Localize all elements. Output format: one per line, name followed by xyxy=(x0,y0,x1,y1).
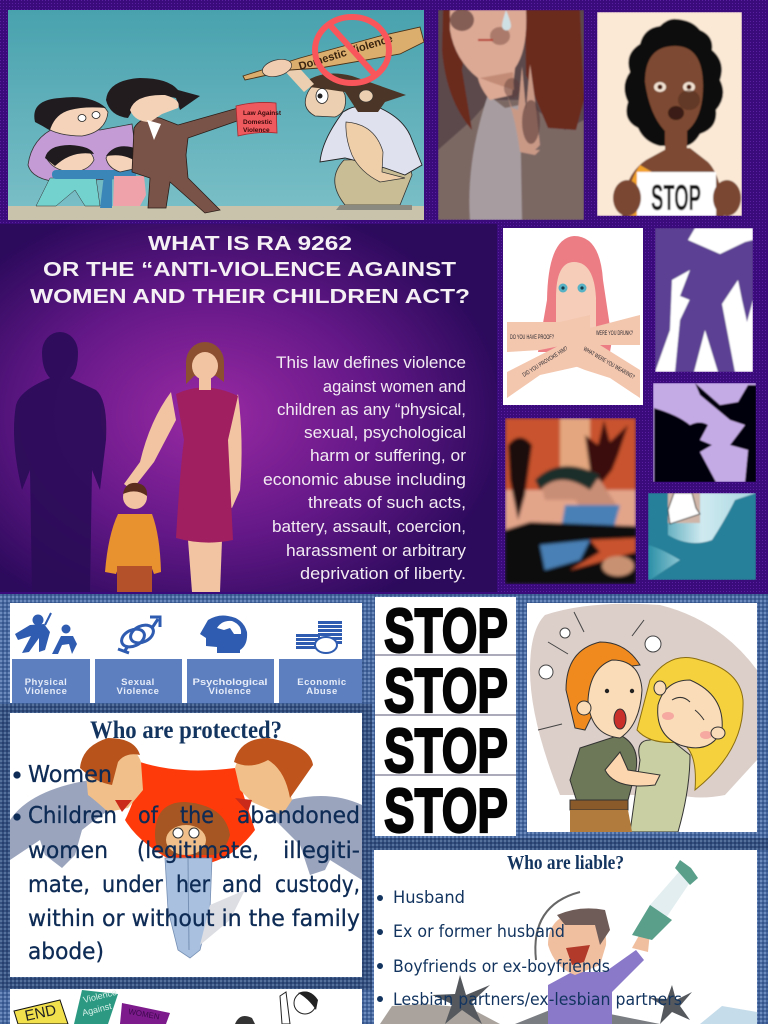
illustration: raised hand xyxy=(506,64,540,155)
panel: silenced woman with questioning hands: WERE YOU DRUNK? xyxy=(596,331,633,337)
panel: end violence placards xyxy=(10,987,362,1024)
list: liable persons: Husband xyxy=(393,888,465,907)
text: law definition: deprivation of liberty. xyxy=(300,565,466,583)
icon: violence against sign: Against xyxy=(81,1001,113,1018)
panel: who are liable xyxy=(374,850,757,1024)
list: liable persons xyxy=(377,888,682,1009)
illustration: shirt xyxy=(469,95,522,220)
list: protected persons xyxy=(14,762,360,965)
darker denim strip above liable panel xyxy=(372,838,768,850)
list: protected persons: under xyxy=(102,872,163,898)
heading: WOMEN AND THEIR CHILDREN ACT? xyxy=(30,286,470,308)
panel: four STOP signs: STOP xyxy=(384,657,508,726)
panel: family confronting abuser illustration xyxy=(8,10,424,220)
list: protected persons: illegiti- xyxy=(283,838,360,864)
icon: END sign xyxy=(14,1000,68,1024)
heading: who are protected: Who are protected? xyxy=(90,717,282,744)
panel: four STOP signs: STOP xyxy=(384,597,508,666)
panel: four STOP signs: STOP xyxy=(384,777,508,846)
panel: four STOP signs xyxy=(375,597,516,846)
label: physical violence: Violence xyxy=(25,686,67,697)
darker denim strip around protected panel xyxy=(0,704,372,990)
icon: women sign: WOMEN xyxy=(128,1007,161,1021)
list: protected persons: her xyxy=(176,872,210,898)
text: law definition: against women and xyxy=(323,378,466,396)
panel: woman holding STOP sign xyxy=(597,12,742,218)
panel: angry man grabbing crying woman xyxy=(527,603,757,832)
panel: fist over teal silhouette xyxy=(648,493,756,580)
callout: STOP sign: STOP xyxy=(651,177,701,218)
icon: law document: Violence xyxy=(243,127,270,134)
panel: four STOP signs: STOP xyxy=(384,717,508,786)
illustration: hands xyxy=(613,180,641,216)
illustration: woman in dress xyxy=(124,342,242,592)
icon: violence against sign xyxy=(74,987,118,1024)
text: law definition: economic abuse including xyxy=(263,471,466,489)
illustration: pink hair and face xyxy=(538,236,612,352)
list: protected persons: abandoned xyxy=(237,803,360,829)
illustration: abusive man xyxy=(282,60,422,210)
icon: physical violence xyxy=(15,613,77,654)
list: protected persons: Women xyxy=(28,762,112,788)
callout: STOP sign xyxy=(637,172,716,218)
icon: women sign xyxy=(120,1003,170,1024)
illustration: mother shielding children xyxy=(28,97,146,208)
icon: fist xyxy=(668,493,700,524)
illustration: drunk man with bottle xyxy=(380,860,757,1024)
illustration: male shadow silhouette xyxy=(14,332,106,592)
list: protected persons: within or without in the family xyxy=(28,906,360,932)
heading: WHAT IS RA 9262 xyxy=(148,233,352,255)
illustration: face and neck xyxy=(450,10,526,100)
label: economic abuse xyxy=(279,659,362,703)
label: psychological violence xyxy=(187,659,274,703)
icon: sexual violence symbols xyxy=(118,617,160,653)
text: law definition: harm or suffering, or xyxy=(310,447,467,465)
icon: law document: Domestic xyxy=(243,119,273,126)
panel: types of violence xyxy=(10,603,362,703)
denim background lower xyxy=(0,594,768,1024)
list: protected persons: women xyxy=(28,838,108,864)
text: law definition: children as any “physical, xyxy=(277,401,466,419)
heading: who are liable: Who are liable? xyxy=(507,852,624,874)
heading xyxy=(30,236,468,303)
list: liable persons: Boyfriends or ex-boyfriends xyxy=(393,957,610,976)
text: law definition: threats of such acts, xyxy=(308,494,466,512)
panel: silenced woman with questioning hands: WHAT WERE YOU WEARING? xyxy=(582,347,636,381)
text: law definition: harassment or arbitrary xyxy=(286,542,467,560)
illustration: child in orange xyxy=(105,483,161,592)
panel: RA 9262 explanation xyxy=(0,224,497,592)
icon: law document: Law Against xyxy=(243,110,282,117)
icon: psychological head xyxy=(200,616,247,653)
illustration: hanging hair shadow xyxy=(508,438,532,520)
icon: violence against sign: Violence xyxy=(82,987,118,1005)
text: law definition: This law defines violence xyxy=(276,354,466,372)
panel: silenced woman with questioning hands xyxy=(503,228,643,405)
list: liable persons: Ex or former husband xyxy=(393,922,565,941)
panel: bloody hand and cowering victim xyxy=(505,418,636,584)
illustration: cardigan xyxy=(438,100,584,220)
icon: bat labelled Domestic Violence xyxy=(243,27,424,80)
illustration: dark hand print xyxy=(585,420,628,485)
text: law definition: battery, assault, coercion, xyxy=(272,518,466,536)
illustration: protester sketch xyxy=(235,992,318,1024)
list: protected persons: mate, xyxy=(28,872,90,898)
illustration: hands with questions xyxy=(507,315,640,398)
icon: prohibition sign xyxy=(315,17,389,83)
label: economic abuse: Abuse xyxy=(306,686,338,697)
panel: who are protected xyxy=(10,713,362,977)
icon: economic coins xyxy=(296,621,342,653)
illustration: hair xyxy=(442,10,472,130)
list: liable persons: Lesbian partners/ex-lesbian partners xyxy=(393,990,682,1009)
label: psychological violence: Violence xyxy=(209,686,251,697)
illustration: mouth xyxy=(478,39,493,41)
illustration: man xyxy=(566,642,660,832)
panel: bruised woman close-up xyxy=(438,9,584,220)
illustration: dark foreground xyxy=(505,522,636,584)
panel: black silhouette on lilac xyxy=(653,383,756,482)
label: sexual violence xyxy=(95,659,182,703)
illustration: woman in brown suit xyxy=(106,78,240,213)
list: protected persons: Children xyxy=(28,803,117,829)
icon: law document xyxy=(236,102,282,136)
illustration: woman xyxy=(630,658,743,832)
list: protected persons: abode) xyxy=(28,939,104,965)
list: protected persons: of xyxy=(138,803,159,829)
list: protected persons: the xyxy=(180,803,214,829)
illustration: parents shouting over child xyxy=(10,738,362,958)
label: sexual violence: Violence xyxy=(117,686,159,697)
list: protected persons: and xyxy=(222,872,262,898)
text: law definition: sexual, psychological xyxy=(304,424,466,442)
label: physical violence xyxy=(12,659,90,703)
list: protected persons: (legitimate, xyxy=(137,838,259,864)
icon: bat labelled Domestic Violence: Domestic Violence xyxy=(297,33,394,73)
label: physical violence: Physical xyxy=(25,677,67,688)
label: economic abuse: Economic xyxy=(297,677,347,688)
list: protected persons: custody, xyxy=(275,872,360,898)
illustration: afro hair xyxy=(624,19,723,146)
icon: anger puffs xyxy=(538,612,661,730)
illustration: face xyxy=(645,46,703,136)
icon: teardrop xyxy=(502,10,511,30)
illustration: cowering figure xyxy=(540,476,616,507)
heading: OR THE “ANTI-VIOLENCE AGAINST xyxy=(43,259,456,281)
panel: purple silhouette assault xyxy=(655,228,753,372)
purple background upper xyxy=(0,0,768,594)
panel: silenced woman with questioning hands: DO YOU HAVE PROOF? xyxy=(510,335,554,341)
text: law definition xyxy=(263,354,467,583)
illustration: orange top and shoulders xyxy=(622,148,724,216)
label: psychological violence: Psychological xyxy=(192,677,268,688)
panel: silenced woman with questioning hands: DID YOU PROVOKE HIM? xyxy=(522,346,570,379)
label: sexual violence: Sexual xyxy=(121,677,155,688)
